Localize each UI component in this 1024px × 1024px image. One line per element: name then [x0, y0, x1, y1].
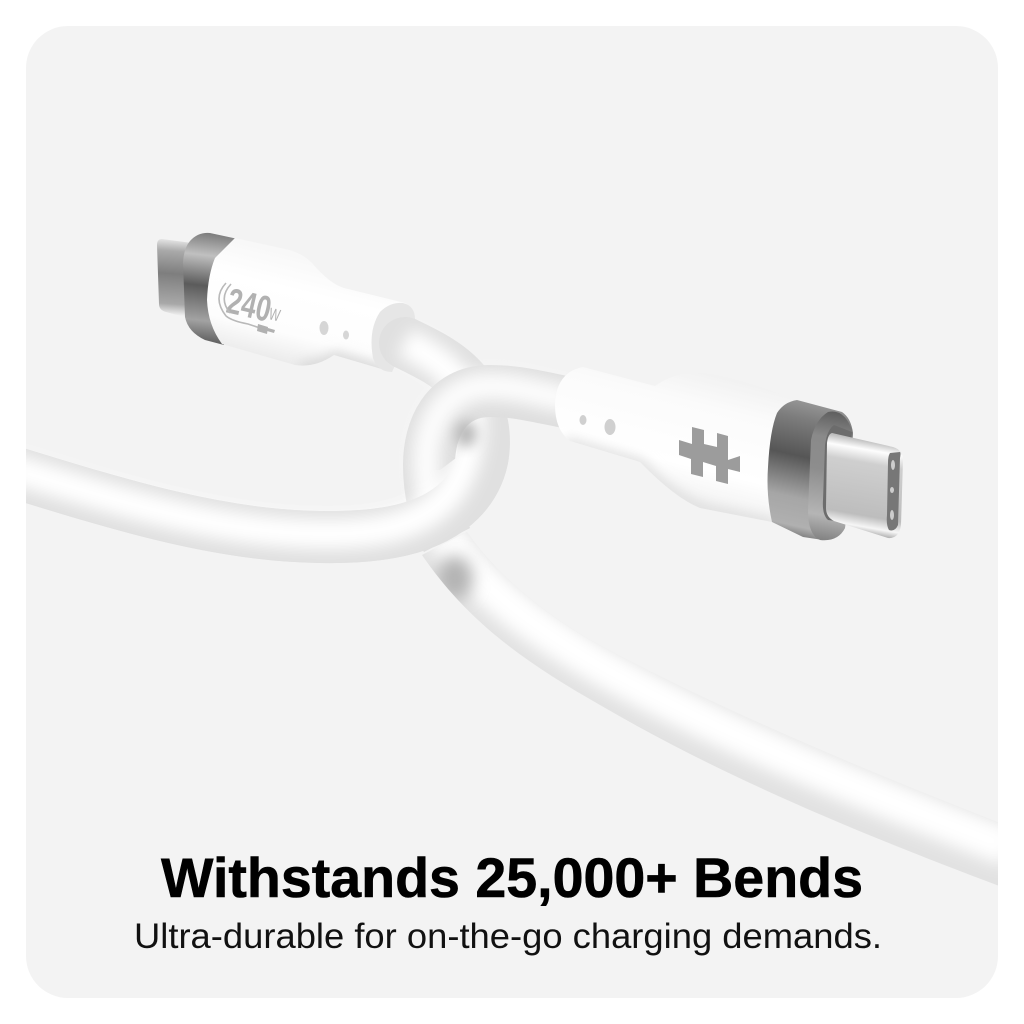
left metal collar: [183, 233, 238, 345]
right collar recess: [823, 425, 852, 522]
left connector tip: [157, 239, 192, 318]
title: Withstands 25,000+ Bends: [161, 846, 863, 909]
connector pins: [890, 460, 895, 520]
right body shading: [565, 442, 775, 525]
tiny cable plug icon: [257, 324, 275, 334]
right connector shell: [826, 433, 903, 538]
right metal collar: [768, 400, 853, 540]
watt unit: W: [267, 304, 282, 325]
right plug body: [555, 367, 797, 522]
cable strand: upper loop to right plug: [426, 386, 570, 540]
left strain relief ring: [372, 303, 415, 372]
left body shading: [300, 358, 395, 376]
240W badge: [219, 280, 282, 334]
cable strand: lower right run: [422, 532, 1010, 890]
left USB-C plug: [157, 233, 415, 376]
charging arcs icon: [219, 283, 260, 328]
left dots: [320, 321, 349, 340]
right dots: [580, 415, 616, 435]
right USB-C plug: [555, 367, 903, 540]
left plug body: [207, 238, 415, 372]
cable knot illustration: [10, 342, 1010, 890]
connector opening: [887, 452, 900, 530]
subtitle: Ultra-durable for on-the-go charging demands.: [134, 917, 882, 956]
wattage label: 240: [223, 280, 275, 330]
brand logo: [679, 427, 740, 484]
cable strand: front crossing: [407, 458, 462, 540]
right collar front ring: [808, 411, 853, 540]
cable strand: left run looping to left plug: [26, 319, 510, 470]
